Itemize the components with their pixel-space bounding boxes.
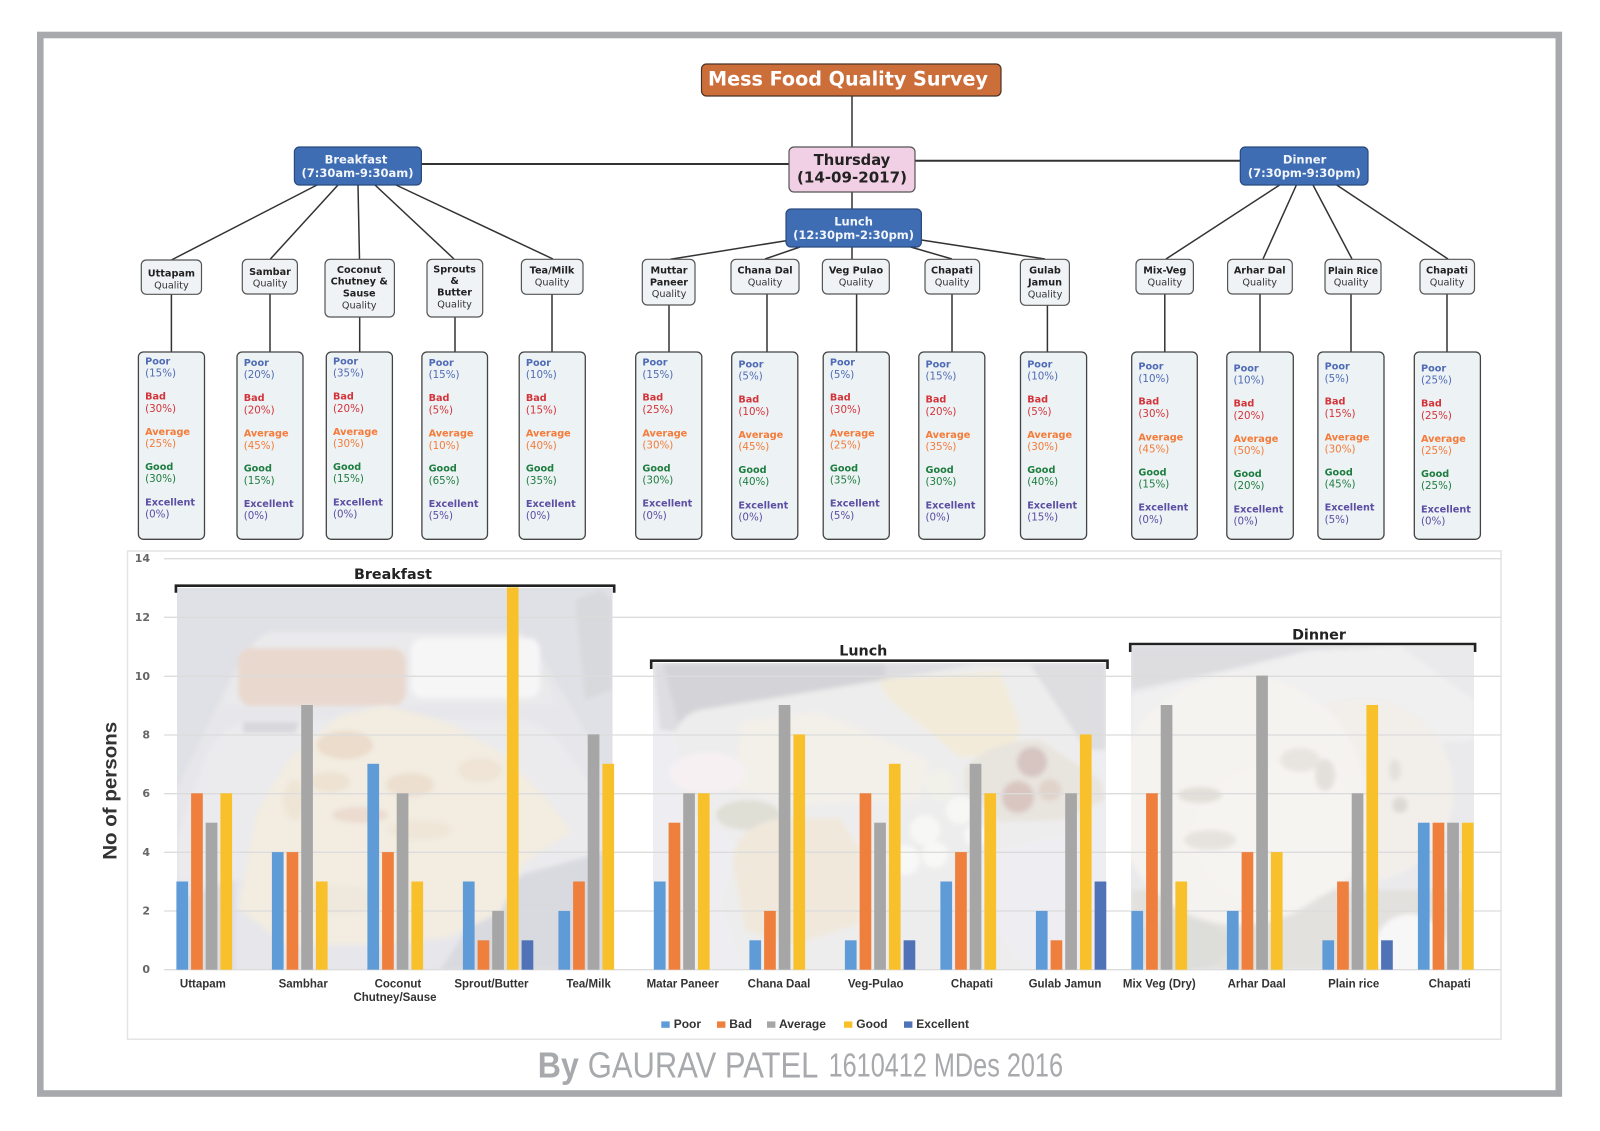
ratings panel: Chana Dal: (0%) <box>738 512 763 524</box>
ratings panel: Gulab Jamun: (10%) <box>1027 371 1058 383</box>
bars: Coconut Chutney/Sause <box>367 764 423 970</box>
x axis labels <box>180 978 1471 1004</box>
x axis labels: Matar Paneer <box>647 979 719 991</box>
item: Muttar Paneer <box>642 259 695 305</box>
ratings panel: Arhar Dal: Poor <box>1234 363 1259 374</box>
node: Breakfast: Breakfast <box>325 152 388 166</box>
ratings panel: Chapati dinner: (25%) <box>1421 480 1452 492</box>
ratings panel: Plain Rice: (45%) <box>1325 478 1356 490</box>
item: Coconut Chutney and Sause <box>325 259 394 317</box>
x axis labels: Chutney/Sause <box>353 992 437 1004</box>
legend: Good <box>856 1017 888 1031</box>
ratings panel: Gulab Jamun: (15%) <box>1027 512 1058 524</box>
item: Veg Pulao: Quality <box>839 277 874 288</box>
ratings panel: Veg Pulao: Poor <box>830 358 855 369</box>
ratings panel: Veg Pulao: Bad <box>830 393 851 404</box>
title: Mess Food Quality Survey <box>708 68 988 91</box>
ratings panel: Mix-Veg: (0%) <box>1138 514 1163 526</box>
ratings panel: Arhar Dal: Bad <box>1234 398 1254 409</box>
ratings panel: Veg Pulao: (5%) <box>830 510 854 522</box>
ratings panel: Tea/Milk: Poor <box>526 358 551 369</box>
bracket: Dinner <box>1130 628 1475 652</box>
gridlines <box>164 559 1501 970</box>
bar chart <box>100 551 1501 1039</box>
ratings panel: Muttar Paneer: Good <box>642 463 671 474</box>
ratings panel: Chapati dinner: (25%) <box>1421 375 1452 387</box>
bars: Arhar Daal <box>1227 676 1283 970</box>
ratings panel: Veg Pulao: (30%) <box>830 404 861 416</box>
author credit: GAURAV PATEL <box>588 1044 818 1086</box>
ratings panel: Sprouts and Butter: Poor <box>429 358 454 369</box>
ratings panel: Plain Rice: (5%) <box>1325 373 1349 385</box>
item: Coconut Chutney and Sause: Chutney & <box>331 277 388 288</box>
title <box>702 64 1001 96</box>
ratings panel: Sprouts and Butter: (5%) <box>429 510 453 522</box>
item: Chapati dinner: Quality <box>1430 277 1465 288</box>
item: Sambar: Sambar <box>249 267 291 278</box>
ratings panel: Tea/Milk: (10%) <box>526 369 557 381</box>
ratings panel: Chana Dal: Excellent <box>738 500 789 511</box>
ratings panel: Sprouts and Butter: (15%) <box>429 369 460 381</box>
ratings panel: Uttapam: (15%) <box>145 368 176 380</box>
legend: Excellent <box>916 1017 969 1031</box>
ratings panel: Sprouts and Butter: Excellent <box>429 499 479 510</box>
ratings panel: Chapati dinner: (25%) <box>1421 445 1452 457</box>
item: Mix-Veg <box>1136 259 1193 294</box>
photo: breakfast uttapam tray <box>177 588 613 970</box>
ratings panel: Mix-Veg: Poor <box>1138 362 1164 373</box>
y axis ticks: 2 <box>142 904 150 918</box>
node: Dinner: Dinner <box>1283 152 1327 166</box>
ratings panel: Chapati lunch: (15%) <box>925 371 956 383</box>
tree connectors <box>171 96 1448 352</box>
ratings panel: Arhar Dal: (10%) <box>1234 375 1264 387</box>
ratings panel: Arhar Dal: Excellent <box>1234 504 1284 515</box>
author credit <box>538 1044 1063 1086</box>
x axis labels: Chapati <box>1429 979 1471 991</box>
bracket: Lunch: Lunch <box>839 644 887 660</box>
ratings panel: Mix-Veg <box>1132 352 1197 539</box>
ratings panel: Chapati lunch: Good <box>925 465 954 476</box>
ratings panel: Muttar Paneer: (30%) <box>642 474 673 486</box>
ratings panel: Mix-Veg: (15%) <box>1138 478 1169 490</box>
ratings panel: Plain Rice: Good <box>1325 467 1353 478</box>
y axis title: No of persons <box>100 722 122 860</box>
ratings panel: Mix-Veg: (30%) <box>1138 408 1169 420</box>
y axis ticks: 14 <box>135 552 150 565</box>
item: Plain Rice <box>1325 259 1381 294</box>
ratings panel: Muttar Paneer: Bad <box>642 393 663 404</box>
x axis labels: Sambhar <box>279 979 328 991</box>
ratings panel: Chapati dinner: Excellent <box>1421 504 1471 515</box>
item: Mix-Veg: Mix-Veg <box>1143 266 1186 277</box>
ratings panel: Muttar Paneer: (15%) <box>642 369 673 381</box>
ratings panel: Coconut Chutney: (30%) <box>333 438 364 450</box>
item: Sprouts and Butter: Butter <box>437 288 472 299</box>
item: Coconut Chutney and Sause: Sause <box>343 288 376 299</box>
ratings panel: Sprouts and Butter: Average <box>429 429 474 440</box>
item: Chapati lunch: Chapati <box>931 266 973 277</box>
node: Lunch: Lunch <box>834 214 873 228</box>
y axis ticks: 0 <box>142 963 150 976</box>
ratings panel: Plain Rice: Bad <box>1325 397 1346 408</box>
ratings panel: Coconut Chutney <box>326 352 392 539</box>
ratings panel: Chapati dinner: Bad <box>1421 398 1442 409</box>
bars: Sprout/Butter <box>463 587 533 970</box>
ratings panel: Coconut Chutney: Average <box>333 427 378 438</box>
y axis ticks: 6 <box>142 787 150 800</box>
x axis labels: Uttapam <box>180 979 226 991</box>
ratings panel: Uttapam <box>138 352 204 539</box>
ratings panel: Muttar Paneer: Excellent <box>642 499 693 510</box>
legend: Bad <box>729 1017 752 1031</box>
ratings panel: Coconut Chutney: Excellent <box>333 497 383 508</box>
ratings panel: Chana Dal: (40%) <box>738 476 769 488</box>
ratings panel: Mix-Veg: (10%) <box>1138 373 1169 385</box>
ratings panel: Chapati lunch: (35%) <box>925 441 956 453</box>
ratings panel: Arhar Dal <box>1227 352 1293 539</box>
ratings panel: Chapati lunch: Poor <box>925 359 951 370</box>
ratings panel: Tea/Milk: (40%) <box>526 440 557 452</box>
item: Uttapam: Uttapam <box>148 269 195 280</box>
date node: Thursday: Thursday <box>814 152 891 169</box>
ratings panel: Plain Rice: Average <box>1325 432 1370 443</box>
node: Lunch: (12:30pm-2:30pm) <box>793 228 914 242</box>
item: Arhar Dal <box>1228 259 1292 294</box>
ratings panel: Chana Dal: (45%) <box>738 441 769 453</box>
ratings panel: Veg Pulao: Excellent <box>830 499 880 510</box>
ratings panel: Sambar: Bad <box>244 393 265 404</box>
ratings panel: Tea/Milk <box>519 352 585 539</box>
y axis ticks: 12 <box>135 611 150 624</box>
item: Uttapam: Quality <box>154 281 189 292</box>
ratings panel: Mix-Veg: Bad <box>1138 397 1159 408</box>
legend: Average <box>779 1017 826 1031</box>
x axis labels: Coconut <box>375 979 421 991</box>
ratings panel: Sprouts and Butter: Good <box>429 464 457 475</box>
y axis ticks: 4 <box>142 846 150 859</box>
item: Coconut Chutney and Sause: Quality <box>342 300 377 311</box>
author credit: By <box>538 1044 579 1086</box>
ratings panel: Sambar: Excellent <box>244 499 294 510</box>
photo: dinner roti tray <box>1115 646 1474 986</box>
item: Chana Dal: Chana Dal <box>737 266 793 277</box>
node: Dinner: (7:30pm-9:30pm) <box>1248 166 1361 180</box>
ratings panel: Chapati dinner: (0%) <box>1421 516 1445 528</box>
ratings panel: Uttapam: Average <box>145 427 190 438</box>
legend: Poor <box>674 1017 701 1031</box>
item: Arhar Dal: Arhar Dal <box>1234 266 1286 277</box>
ratings panel: Chapati dinner: (25%) <box>1421 410 1452 422</box>
ratings panel: Veg Pulao: Good <box>830 463 858 474</box>
ratings panel: Chana Dal: (10%) <box>738 406 769 418</box>
ratings panel: Coconut Chutney: Bad <box>333 391 354 402</box>
ratings panel: Sambar: Poor <box>244 358 269 369</box>
item: Veg Pulao <box>822 259 889 294</box>
ratings panel: Veg Pulao: (35%) <box>830 474 861 486</box>
ratings panel: Sambar: (45%) <box>244 440 275 452</box>
item: Muttar Paneer: Paneer <box>650 277 688 288</box>
ratings panel: Arhar Dal: (0%) <box>1234 516 1258 528</box>
ratings panel: Muttar Paneer: (30%) <box>642 439 673 451</box>
item: Muttar Paneer: Muttar <box>650 266 688 277</box>
ratings panel: Uttapam: (30%) <box>145 473 176 485</box>
x axis labels: Tea/Milk <box>566 979 611 991</box>
ratings panel: Chapati dinner: Good <box>1421 469 1449 480</box>
ratings panel: Sprouts and Butter: (5%) <box>429 405 453 417</box>
item: Tea/Milk: Quality <box>535 277 570 288</box>
date node: Thursday: (14-09-2017) <box>797 169 907 186</box>
x axis labels: Chapati <box>951 979 993 991</box>
ratings panel: Tea/Milk: Bad <box>526 393 547 404</box>
ratings panel: Gulab Jamun <box>1020 352 1087 539</box>
bars: Tea/Milk <box>558 734 614 970</box>
item: Chapati dinner <box>1420 259 1474 294</box>
ratings panel: Muttar Paneer: Average <box>642 428 688 439</box>
ratings panel: Uttapam: (30%) <box>145 403 176 415</box>
ratings panel: Coconut Chutney: Good <box>333 462 361 473</box>
y axis ticks: 10 <box>135 670 150 683</box>
x axis labels: Mix Veg (Dry) <box>1123 979 1196 991</box>
bars: Chapati dinner <box>1418 823 1474 970</box>
item: Sprouts and Butter: & <box>450 276 459 287</box>
ratings panel: Chapati lunch: (0%) <box>925 512 950 524</box>
ratings panel: Mix-Veg: (45%) <box>1138 443 1169 455</box>
ratings panel: Sambar: (20%) <box>244 405 275 417</box>
item: Veg Pulao: Veg Pulao <box>829 266 884 277</box>
bars: Sambhar <box>272 705 328 970</box>
bars: Gulab Jamun <box>1036 734 1106 970</box>
ratings panel: Mix-Veg: Excellent <box>1138 503 1189 514</box>
ratings panel: Sambar <box>237 352 303 539</box>
node: Breakfast <box>294 147 421 185</box>
ratings panel: Muttar Paneer: (0%) <box>642 510 667 522</box>
bracket: Breakfast: Breakfast <box>354 567 432 583</box>
ratings panel: Chana Dal: (5%) <box>738 371 763 383</box>
ratings panel: Plain Rice: (15%) <box>1325 408 1356 420</box>
item: Uttapam <box>141 260 202 294</box>
legend <box>661 1017 969 1031</box>
ratings panel: Mix-Veg: Average <box>1138 432 1184 443</box>
ratings panel: Arhar Dal: (20%) <box>1234 410 1264 422</box>
ratings panel: Muttar Paneer <box>636 352 702 539</box>
item: Coconut Chutney and Sause: Coconut <box>337 265 382 276</box>
ratings panel: Gulab Jamun: (40%) <box>1027 476 1058 488</box>
ratings panel: Tea/Milk: Good <box>526 464 554 475</box>
item: Gulab Jamun: Gulab <box>1029 266 1061 277</box>
ratings panel: Veg Pulao: (25%) <box>830 439 861 451</box>
ratings panel: Gulab Jamun: (5%) <box>1027 406 1052 418</box>
ratings panel: Chana Dal: Bad <box>738 394 759 405</box>
bracket: Breakfast <box>176 567 614 593</box>
item: Gulab Jamun: Jamun <box>1027 278 1062 289</box>
ratings panel: Gulab Jamun: Bad <box>1027 394 1048 405</box>
bars: Chapati lunch <box>940 764 996 970</box>
ratings panel: Plain Rice: (30%) <box>1325 443 1356 455</box>
photo: lunch thali tray <box>653 663 1106 990</box>
item: Chana Dal <box>731 259 799 294</box>
ratings panel: Tea/Milk: (0%) <box>526 510 550 522</box>
ratings panel: Sprouts and Butter: (65%) <box>429 475 460 487</box>
ratings panel: Coconut Chutney: (35%) <box>333 368 364 380</box>
ratings panel: Chapati dinner <box>1414 352 1480 539</box>
item: Sprouts and Butter: Sprouts <box>433 264 476 275</box>
node: Breakfast: (7:30am-9:30am) <box>302 166 413 180</box>
ratings panel: Chapati lunch: Average <box>925 430 971 441</box>
item: Sambar: Quality <box>253 279 288 290</box>
y axis ticks <box>135 552 150 976</box>
ratings panel: Plain Rice: Excellent <box>1325 503 1375 514</box>
item: Gulab Jamun <box>1020 259 1069 305</box>
ratings panel: Veg Pulao: Average <box>830 428 875 439</box>
ratings panel: Gulab Jamun: Excellent <box>1027 500 1077 511</box>
ratings panel: Sambar: Good <box>244 464 272 475</box>
item: Sambar <box>242 259 297 294</box>
x axis labels: Gulab Jamun <box>1029 979 1101 991</box>
ratings panel: Chapati dinner: Poor <box>1421 363 1446 374</box>
ratings panel: Chana Dal: Average <box>738 430 784 441</box>
bracket: Dinner: Dinner <box>1292 628 1347 644</box>
ratings panel: Coconut Chutney: (15%) <box>333 473 364 485</box>
ratings panel: Arhar Dal: Average <box>1234 434 1279 445</box>
item: Plain Rice: Plain Rice <box>1328 266 1378 277</box>
ratings panel: Chana Dal <box>732 352 798 539</box>
ratings panel: Chana Dal: Poor <box>738 359 764 370</box>
ratings panel: Chana Dal: Good <box>738 465 767 476</box>
item: Tea/Milk: Tea/Milk <box>530 266 575 277</box>
x axis labels: Veg-Pulao <box>848 979 904 991</box>
ratings panel: Sambar: (20%) <box>244 369 275 381</box>
x axis labels: Plain rice <box>1328 979 1379 991</box>
item: Chapati dinner: Chapati <box>1426 266 1468 277</box>
ratings panel: Uttapam: Bad <box>145 391 166 402</box>
ratings panel: Plain Rice: Poor <box>1325 362 1350 373</box>
y axis ticks: 8 <box>142 728 150 742</box>
item: Plain Rice: Quality <box>1334 277 1369 288</box>
bars: Uttapam <box>176 793 232 970</box>
item: Chana Dal: Quality <box>748 277 783 288</box>
x axis labels: Arhar Daal <box>1228 979 1286 991</box>
item: Mix-Veg: Quality <box>1147 277 1182 288</box>
ratings panel: Uttapam: (0%) <box>145 509 169 521</box>
item: Tea/Milk <box>521 259 583 294</box>
bars: Plain rice <box>1322 705 1393 970</box>
ratings panel: Arhar Dal: (20%) <box>1234 480 1264 492</box>
ratings panel: Coconut Chutney: (20%) <box>333 403 364 415</box>
bars: Matar Paneer <box>654 793 710 970</box>
ratings panel: Arhar Dal: Good <box>1234 469 1262 480</box>
bars: Mix Veg (Dry) <box>1131 705 1187 970</box>
ratings panel: Uttapam: Good <box>145 462 173 473</box>
ratings panel: Chapati lunch <box>919 352 985 539</box>
item: Chapati lunch <box>925 259 980 294</box>
ratings panel: Tea/Milk: Excellent <box>526 499 576 510</box>
bars: Chana Daal <box>749 705 805 970</box>
item: Gulab Jamun: Quality <box>1028 289 1063 300</box>
ratings panel: Chapati lunch: Bad <box>925 394 946 405</box>
ratings panel: Tea/Milk: (35%) <box>526 475 557 487</box>
ratings panel: Gulab Jamun: Poor <box>1027 359 1053 370</box>
ratings panel: Plain Rice: (5%) <box>1325 514 1349 526</box>
ratings panel: Gulab Jamun: Good <box>1027 465 1055 476</box>
ratings panel: Gulab Jamun: Average <box>1027 430 1072 441</box>
ratings panel: Uttapam: Excellent <box>145 497 195 508</box>
ratings panel: Veg Pulao <box>823 352 889 539</box>
ratings panel: Tea/Milk: Average <box>526 429 571 440</box>
ratings panel: Chapati lunch: Excellent <box>925 500 976 511</box>
ratings panel: Coconut Chutney: Poor <box>333 356 358 367</box>
item: Sprouts and Butter <box>427 259 483 317</box>
ratings panel: Uttapam: Poor <box>145 356 171 367</box>
item: Muttar Paneer: Quality <box>652 289 687 300</box>
chart frame <box>128 551 1501 1039</box>
ratings panel: Sprouts and Butter: Bad <box>429 393 450 404</box>
item: Arhar Dal: Quality <box>1242 277 1277 288</box>
bracket: Lunch <box>651 644 1108 669</box>
item: Chapati lunch: Quality <box>935 277 970 288</box>
bars: Veg-Pulao <box>845 764 915 970</box>
author credit: 1610412 MDes 2016 <box>829 1046 1063 1084</box>
ratings panel: Muttar Paneer: Poor <box>642 358 668 369</box>
x axis labels: Chana Daal <box>748 979 810 991</box>
ratings panel: Chapati lunch: (30%) <box>925 476 956 488</box>
node: Lunch <box>786 209 921 247</box>
ratings panel: Gulab Jamun: (30%) <box>1027 441 1058 453</box>
ratings panel: Sambar: (15%) <box>244 475 275 487</box>
ratings panel: Sambar: Average <box>244 429 289 440</box>
date node: Thursday <box>789 147 915 192</box>
ratings panel: Sprouts and Butter: (10%) <box>429 440 460 452</box>
item: Sprouts and Butter: Quality <box>437 299 472 310</box>
ratings panel: Uttapam: (25%) <box>145 438 176 450</box>
ratings panel: Coconut Chutney: (0%) <box>333 509 357 521</box>
ratings panel: Sprouts and Butter <box>422 352 488 539</box>
ratings panel: Chapati lunch: (20%) <box>925 406 956 418</box>
node: Dinner <box>1240 147 1368 185</box>
ratings panel: Mix-Veg: Good <box>1138 467 1167 478</box>
ratings panel: Plain Rice <box>1318 352 1384 539</box>
ratings panel: Sambar: (0%) <box>244 510 268 522</box>
x axis labels: Sprout/Butter <box>454 979 529 991</box>
ratings panel: Veg Pulao: (5%) <box>830 369 854 381</box>
ratings panel: Arhar Dal: (50%) <box>1234 445 1264 457</box>
ratings panel: Muttar Paneer: (25%) <box>642 404 673 416</box>
ratings panel: Tea/Milk: (15%) <box>526 405 557 417</box>
ratings panel: Chapati dinner: Average <box>1421 434 1466 445</box>
